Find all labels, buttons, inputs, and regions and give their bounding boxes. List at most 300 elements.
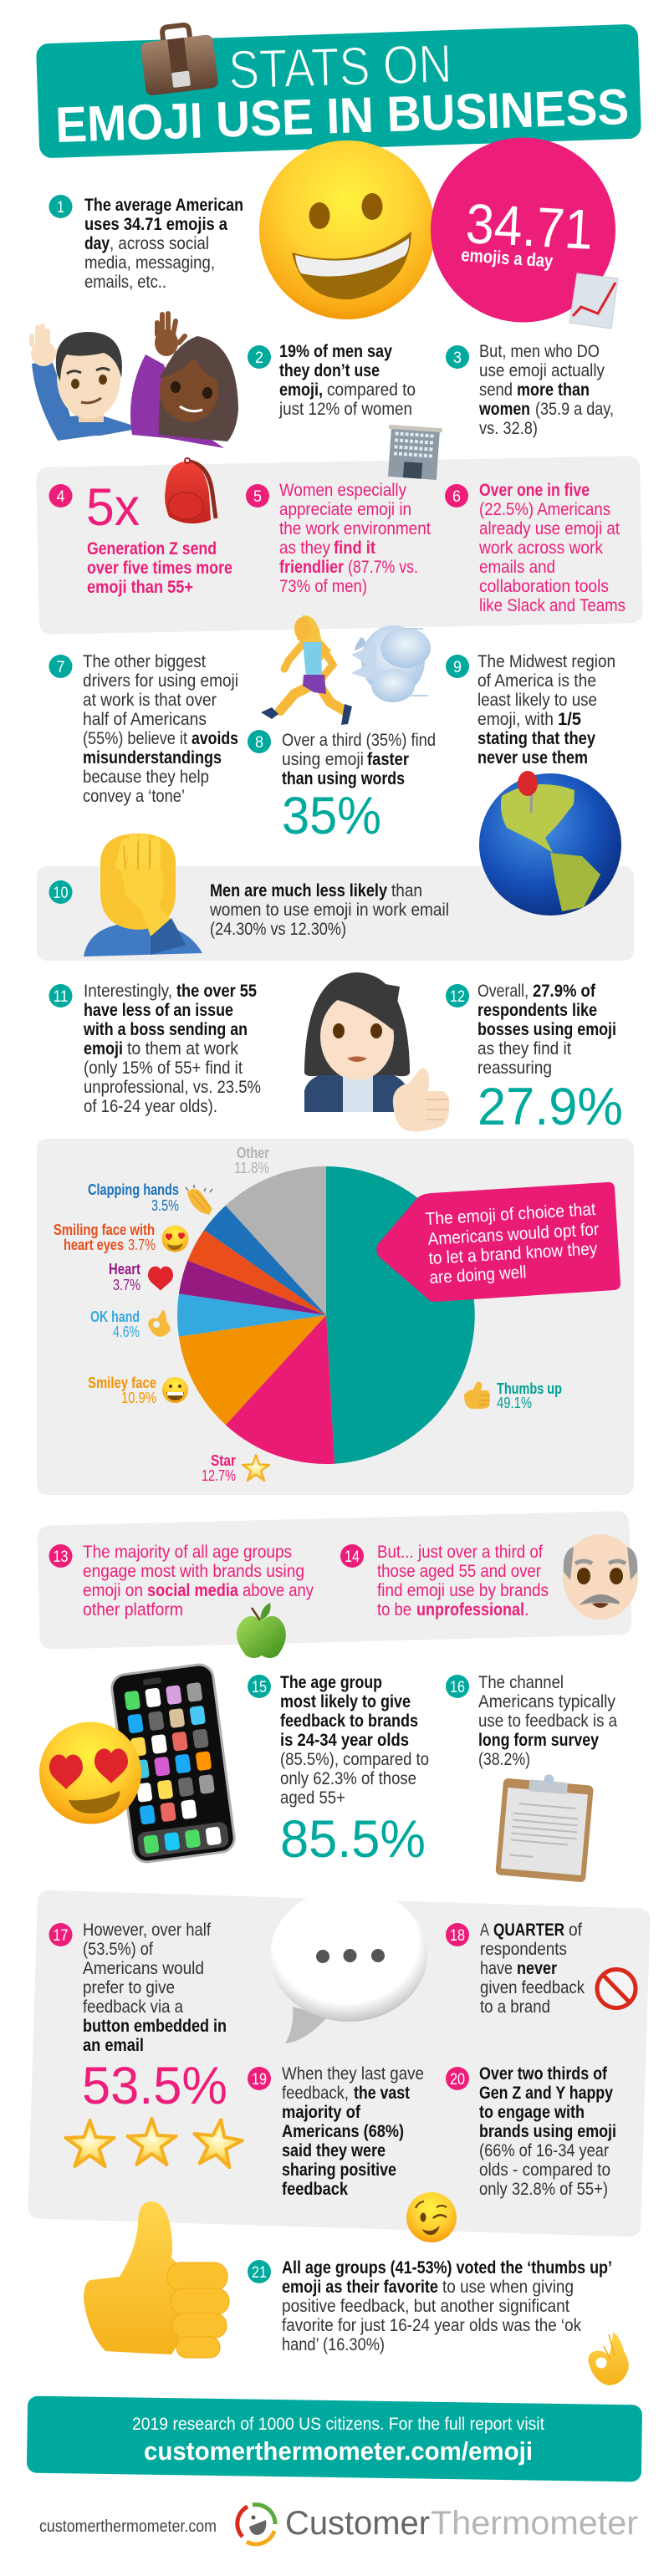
- item 7: [49, 652, 238, 806]
- text 20: only 32.8% of 55+): [479, 2180, 608, 2199]
- badge 17: 17: [54, 1927, 69, 1945]
- text 8: than using words: [282, 769, 405, 788]
- text 5: Women especially: [279, 481, 406, 500]
- icon: chart: [569, 273, 618, 329]
- text 19: Americans (68%): [282, 2122, 404, 2141]
- text 8: Over a third (35%) find: [282, 731, 436, 750]
- text 2: 19% of men say: [279, 342, 392, 361]
- icon: phone: [110, 1663, 236, 1864]
- text 14: [377, 1543, 549, 1620]
- text 17: (53.5%) of: [83, 1940, 153, 1959]
- badge 7: 7: [57, 659, 65, 676]
- item 12: [446, 982, 623, 1136]
- text 19: said they were: [282, 2141, 386, 2160]
- callout: emoji of choice: are doing well: [429, 1262, 527, 1288]
- text 7: (55%) believe it: [83, 729, 187, 748]
- text 9: 1/5: [558, 710, 581, 729]
- text 13: other platform: [83, 1600, 183, 1620]
- text 3: vs. 32.8): [479, 419, 538, 438]
- text 11: to them at work: [127, 1039, 238, 1058]
- text 20: (66% of 16-34 year: [479, 2141, 609, 2160]
- badge 18: [446, 1923, 469, 1946]
- label: smiling face with heart eyes: [54, 1222, 156, 1253]
- icon: apple: [237, 1603, 286, 1658]
- text 18: have: [480, 1959, 513, 1978]
- text 12: bosses using emoji: [477, 1020, 616, 1039]
- text 7: convey a ‘tone’: [83, 787, 185, 806]
- badge 1: 1: [57, 199, 64, 217]
- text 18: [480, 1921, 585, 2017]
- badge 4: [49, 484, 72, 508]
- text 19: sharing positive: [282, 2160, 396, 2180]
- text 1: uses 34.71 emojis a: [84, 215, 227, 234]
- stat: 27.9%: 27.9%: [477, 1078, 623, 1136]
- text 11: of 16-24 year olds).: [84, 1097, 217, 1116]
- callout: emoji of choice: The emoji of choice that: [425, 1200, 596, 1229]
- icon: clapping hands: [186, 1185, 212, 1215]
- text 14: those aged 55 and over: [377, 1562, 541, 1581]
- text 17: [83, 1921, 227, 2055]
- icon: ok hand: [589, 2332, 629, 2385]
- text 5: appreciate emoji in: [279, 500, 411, 519]
- item 8: [248, 730, 436, 845]
- text 6: collaboration tools: [479, 577, 609, 596]
- text 18: to a brand: [480, 1997, 550, 2017]
- icon: woman running: [261, 615, 352, 725]
- text 21: hand’ (16.30%): [282, 2335, 385, 2354]
- text 20: [479, 2064, 616, 2199]
- text 4: Generation Z send: [87, 539, 217, 559]
- badge 8: 8: [255, 734, 263, 752]
- label: other: Other: [237, 1145, 269, 1161]
- text 6: emails and: [479, 558, 555, 577]
- icon: smiley small: [162, 1377, 188, 1403]
- text 18: respondents: [480, 1940, 567, 1959]
- title banner: [36, 24, 641, 158]
- text 11: have less of an issue: [84, 1001, 233, 1020]
- icon: clipboard: [495, 1771, 595, 1882]
- panel: items 13-14: [37, 1511, 638, 1658]
- stat: 5x: 5x: [86, 478, 140, 537]
- text 5: (87.7% vs.: [348, 558, 418, 577]
- icon: man raising hand: [31, 326, 141, 441]
- text 13: The majority of all age groups: [83, 1543, 292, 1562]
- label: smiley face: 10.9%: [121, 1390, 156, 1406]
- text 16: [478, 1673, 617, 1769]
- item 6: [445, 481, 626, 615]
- text 20: brands using emoji: [479, 2122, 616, 2141]
- badge 4: 4: [57, 488, 65, 506]
- text 19: [282, 2064, 424, 2199]
- text 3: But, men who DO: [479, 342, 600, 361]
- text 15: [280, 1673, 429, 1808]
- icon: speech bubble: [270, 1888, 427, 2043]
- text 9: stating that they: [477, 729, 595, 748]
- text 14: But... just over a third of: [377, 1543, 543, 1562]
- label: heart: 3.7%: [113, 1277, 140, 1293]
- badge 18: 18: [450, 1927, 465, 1945]
- icon: thumbs up (light): [393, 1068, 449, 1131]
- text 10: women to use emoji in work email: [209, 900, 449, 920]
- text 4: over five times more: [87, 559, 232, 578]
- icon: heart eyes face: [39, 1722, 141, 1824]
- text 20: olds - compared to: [479, 2160, 610, 2180]
- text 7: avoids: [192, 729, 238, 748]
- icon: big smiling face: [259, 140, 435, 319]
- text 3: send: [479, 380, 513, 400]
- badge 7: [49, 655, 72, 678]
- label: thumbs up: 49.1%: [497, 1395, 532, 1411]
- item 20: [446, 2064, 616, 2199]
- badge 12: 12: [450, 988, 465, 1006]
- panel: favorite emoji pie chart: [37, 1139, 634, 1495]
- text 13: emoji on: [83, 1581, 143, 1600]
- item 11: [49, 982, 261, 1116]
- text 16: use to feedback is a: [478, 1711, 617, 1731]
- badge 11: 11: [54, 988, 69, 1006]
- badge 10: 10: [54, 885, 69, 902]
- badge 19: 19: [252, 2071, 267, 2089]
- text 3: (35.9 a day,: [535, 400, 614, 419]
- logo wordmark: Thermometer: [431, 2505, 638, 2542]
- badge 16: [446, 1675, 469, 1698]
- text 11: the over 55: [176, 982, 257, 1001]
- text 17: feedback via a: [83, 1997, 183, 2017]
- label: clapping hands: 3.5%: [151, 1197, 179, 1214]
- text 21: to use when giving: [442, 2278, 574, 2297]
- icon: old man: [563, 1534, 638, 1620]
- text 9: never use them: [477, 748, 588, 768]
- text 20: to engage with: [479, 2103, 585, 2122]
- icon: prohibited sign: [597, 1970, 636, 2008]
- badge 3: 3: [453, 349, 462, 367]
- text 6: work across work: [478, 538, 603, 558]
- label: smiley face: Smiley face: [88, 1375, 156, 1391]
- label: clapping hands: [88, 1181, 179, 1214]
- badge 10: [49, 880, 72, 904]
- badge 19: [248, 2067, 271, 2090]
- stat circle: 34.71 emojis a day: emojis a day: [461, 244, 554, 272]
- label: other: [234, 1145, 269, 1176]
- text 15: feedback to brands: [280, 1711, 418, 1731]
- text 16: The channel: [478, 1673, 564, 1692]
- text 1: emails, etc..: [84, 273, 166, 292]
- text 17: However, over half: [83, 1921, 211, 1940]
- text 10: than: [391, 881, 422, 900]
- text 13: above any: [243, 1581, 314, 1600]
- panel: item 10: [37, 834, 634, 961]
- item 1: [49, 195, 243, 292]
- text 9: [477, 652, 615, 768]
- badge 1: [49, 195, 72, 218]
- text 21: favorite for just 16-24 year olds was the ‘ok: [282, 2316, 581, 2335]
- text 1: , across social: [110, 234, 209, 253]
- text 11: emoji: [84, 1039, 123, 1058]
- badge 5: [246, 484, 269, 508]
- icon: briefcase: [139, 22, 219, 96]
- text 5: 73% of men): [279, 577, 367, 596]
- label: heart: [109, 1261, 140, 1293]
- site url: customerthermometer.com: [39, 2517, 217, 2536]
- text 1: media, messaging,: [84, 253, 215, 273]
- text 15: most likely to give: [280, 1692, 411, 1711]
- badge 6: [445, 484, 468, 508]
- logo: [237, 2505, 638, 2544]
- text 18: never: [517, 1959, 557, 1978]
- item 5: [246, 481, 431, 596]
- text 13: social media: [147, 1581, 238, 1600]
- text 5: as they: [279, 538, 330, 558]
- label: clapping hands: Clapping hands: [88, 1181, 179, 1198]
- text 9: least likely to use: [477, 691, 597, 710]
- badge 2: 2: [255, 349, 263, 367]
- text 17: an email: [83, 2036, 144, 2055]
- text 7: half of Americans: [83, 710, 207, 729]
- text 17: prefer to give: [83, 1978, 175, 1997]
- badge 16: 16: [450, 1679, 465, 1696]
- badge 9: 9: [453, 659, 462, 676]
- pie chart: [177, 1166, 475, 1464]
- stat circle: 34.71 emojis a day: 34.71: [464, 192, 595, 262]
- label: thumbs up: Thumbs up: [497, 1380, 562, 1397]
- text 5: the work environment: [279, 519, 431, 538]
- text 14: find emoji use by brands: [377, 1581, 549, 1600]
- item 16: [446, 1673, 617, 1769]
- label: star: 12.7%: [202, 1467, 236, 1484]
- text 1: day: [84, 234, 110, 253]
- text 17: Americans would: [83, 1959, 204, 1978]
- label: smiling face with heart eyes: Smiling face with: [54, 1222, 155, 1238]
- label: ok hand: [90, 1308, 140, 1340]
- text 1: [84, 196, 243, 292]
- text 7: misunderstandings: [83, 748, 222, 768]
- label: heart: Heart: [109, 1261, 140, 1278]
- badge 14: [340, 1544, 364, 1568]
- text 11: with a boss sending an: [83, 1020, 248, 1039]
- item 19: [248, 2064, 424, 2199]
- text 6: Over one in five: [479, 481, 590, 500]
- text 11: [83, 982, 261, 1116]
- icon: winking face: [406, 2192, 457, 2242]
- text 19: feedback,: [282, 2084, 349, 2103]
- icon: facepalm: [84, 834, 202, 956]
- text 7: The other biggest: [83, 652, 206, 671]
- text 7: drivers for using emoji: [83, 671, 238, 691]
- text 7: at work is that over: [83, 691, 217, 710]
- text 5: [279, 481, 431, 596]
- text 18: given feedback: [480, 1978, 585, 1997]
- title line: stats on: STATS ON: [227, 33, 452, 100]
- label: smiling face with heart eyes: heart eyes: [64, 1237, 124, 1253]
- icon: woman raising hand: [130, 314, 238, 448]
- stat circle: 34.71 emojis a day: [431, 137, 615, 323]
- text 16: Americans typically: [478, 1692, 615, 1711]
- label: smiley face: [88, 1375, 156, 1406]
- text 12: [477, 982, 616, 1078]
- text 10: (24.30% vs 12.30%): [210, 920, 346, 939]
- text 4: emoji than 55+: [87, 578, 193, 597]
- icon: three stars: [65, 2116, 245, 2169]
- text 10: Men are much less likely: [210, 881, 387, 900]
- text 6: [478, 481, 626, 615]
- text 6: like Slack and Teams: [479, 596, 626, 615]
- text 8: faster: [367, 750, 409, 769]
- text 1: The average American: [84, 196, 243, 215]
- text 18: of: [569, 1921, 582, 1940]
- panel: generation and gender (items 4-6): [36, 425, 643, 635]
- item 4: [49, 458, 232, 597]
- text 20: Over two thirds of: [479, 2064, 608, 2084]
- text 8: [282, 731, 436, 788]
- item 3: [446, 342, 614, 438]
- text 14: .: [524, 1600, 529, 1620]
- text 21: positive feedback, but another significant: [282, 2297, 569, 2316]
- text 6: (22.5%) Americans: [479, 500, 610, 519]
- text 9: emoji, with: [477, 710, 554, 729]
- icon: dash cloud: [351, 625, 431, 702]
- label: ok hand: OK hand: [90, 1308, 140, 1325]
- icon: businesswoman: [304, 972, 410, 1112]
- badge 13: 13: [54, 1548, 69, 1566]
- label: ok hand: 4.6%: [113, 1324, 140, 1340]
- icon: star small: [243, 1455, 269, 1481]
- text 3: women: [478, 400, 530, 419]
- text 2: just 12% of women: [278, 400, 412, 419]
- text 19: the vast: [354, 2084, 410, 2103]
- text 16: (38.2%): [478, 1750, 530, 1769]
- text 12: as they find it: [477, 1039, 571, 1058]
- text 11: Interestingly,: [84, 982, 172, 1001]
- icon: globe with pin: [479, 771, 621, 916]
- text 17: button embedded in: [83, 2017, 227, 2036]
- icon: backpack: [165, 458, 216, 523]
- text 11: unprofessional, vs. 23.5%: [84, 1078, 261, 1097]
- callout: emoji of choice: [376, 1182, 620, 1302]
- item 18: [446, 1921, 636, 2017]
- text 12: 27.9% of: [533, 982, 596, 1001]
- text 3: use emoji actually: [479, 361, 605, 380]
- text 10: [209, 881, 449, 939]
- label: smiling face with heart eyes: 3.7%: [128, 1237, 156, 1253]
- item 9: [446, 652, 615, 768]
- badge 21: [248, 2260, 271, 2283]
- text 13: engage most with brands using: [83, 1562, 304, 1581]
- text 12: Overall,: [477, 982, 529, 1001]
- footer link: customerthermometer.com/emoji: [144, 2436, 533, 2466]
- badge 14: 14: [345, 1548, 360, 1566]
- logo wordmark: Customer: [285, 2505, 430, 2542]
- icon: big thumbs up: [84, 2201, 229, 2358]
- stat: 35%: 35%: [282, 787, 381, 845]
- text 12: reassuring: [477, 1058, 552, 1078]
- text 15: (85.5%), compared to: [280, 1750, 429, 1769]
- badge 9: [446, 655, 469, 678]
- text 15: is 24-34 year olds: [280, 1731, 409, 1750]
- text 18: QUARTER: [493, 1921, 564, 1940]
- text 14: unprofessional: [416, 1600, 524, 1620]
- label: thumbs up: [497, 1380, 562, 1411]
- text 19: When they last gave: [282, 2064, 424, 2084]
- label: other: 11.8%: [234, 1160, 269, 1176]
- badge 6: 6: [452, 488, 461, 506]
- badge 5: 5: [253, 488, 262, 506]
- badge 17: [49, 1923, 72, 1946]
- text 20: Gen Z and Y happy: [479, 2084, 613, 2103]
- badge 21: 21: [252, 2264, 267, 2282]
- logo wordmark: [285, 2505, 638, 2542]
- badge 20: 20: [450, 2071, 465, 2089]
- text 8: using emoji: [282, 750, 364, 769]
- icon: ok hand small: [148, 1309, 171, 1337]
- title line: emoji use in business: EMOJI USE IN BUSINESS: [54, 79, 630, 153]
- icon: heart eyes small: [162, 1226, 189, 1252]
- text 5: find it: [334, 538, 375, 558]
- text 19: feedback: [282, 2180, 348, 2199]
- text 15: only 62.3% of those: [280, 1769, 416, 1788]
- text 5: friendlier: [279, 558, 344, 577]
- panel: feedback (items 17-20): [28, 1888, 651, 2237]
- logo ring: [237, 2505, 275, 2544]
- text 2: emoji,: [279, 380, 323, 400]
- icon: office building: [386, 425, 442, 480]
- text 15: aged 55+: [280, 1788, 345, 1808]
- stat: 53.5%: 53.5%: [82, 2057, 227, 2115]
- badge 20: [446, 2067, 469, 2090]
- callout: emoji of choice: to let a brand know they: [428, 1239, 598, 1268]
- text 2: they don’t use: [279, 361, 380, 380]
- text 21: All age groups (41-53%) voted the ‘thumbs up’: [282, 2258, 612, 2278]
- callout: emoji of choice: Americans would opt for: [427, 1220, 600, 1249]
- label: star: Star: [211, 1452, 236, 1469]
- text 11: (only 15% of 55+ find it: [84, 1058, 243, 1078]
- text 15: The age group: [280, 1673, 382, 1692]
- text 3: [478, 342, 614, 438]
- badge 2: [248, 345, 271, 369]
- text 9: of America is the: [477, 671, 596, 691]
- text 21: emoji as their favorite: [282, 2278, 438, 2297]
- badge 3: [446, 345, 469, 369]
- text 14: to be: [377, 1600, 411, 1620]
- text 2: [278, 342, 416, 419]
- text 16: long form survey: [478, 1731, 599, 1750]
- stat: 85.5%: 85.5%: [280, 1810, 426, 1869]
- text 13: [83, 1543, 314, 1620]
- item 2: [248, 342, 416, 419]
- text 4: [87, 539, 232, 597]
- footer banner: [27, 2396, 642, 2482]
- label: star: [202, 1452, 236, 1484]
- icon: thumbs up small: [464, 1381, 490, 1409]
- text 12: respondents like: [477, 1001, 597, 1020]
- text 18: A: [480, 1921, 489, 1940]
- text 21: [282, 2258, 612, 2354]
- icon: heart: [148, 1267, 173, 1291]
- text 2: compared to: [327, 380, 416, 400]
- badge 12: [446, 984, 469, 1007]
- footer research note: 2019 research of 1000 US citizens. For the full report visit: [132, 2415, 544, 2434]
- text 7: [83, 652, 238, 806]
- badge 8: [248, 730, 271, 753]
- text 6: already use emoji at: [479, 519, 620, 538]
- badge 15: 15: [252, 1679, 267, 1696]
- item 17: [49, 1921, 245, 2169]
- badge 13: [49, 1544, 72, 1568]
- item 21: [248, 2258, 612, 2354]
- text 7: because they help: [83, 768, 209, 787]
- text 9: The Midwest region: [477, 652, 615, 671]
- badge 15: [248, 1675, 271, 1698]
- text 19: majority of: [282, 2103, 361, 2122]
